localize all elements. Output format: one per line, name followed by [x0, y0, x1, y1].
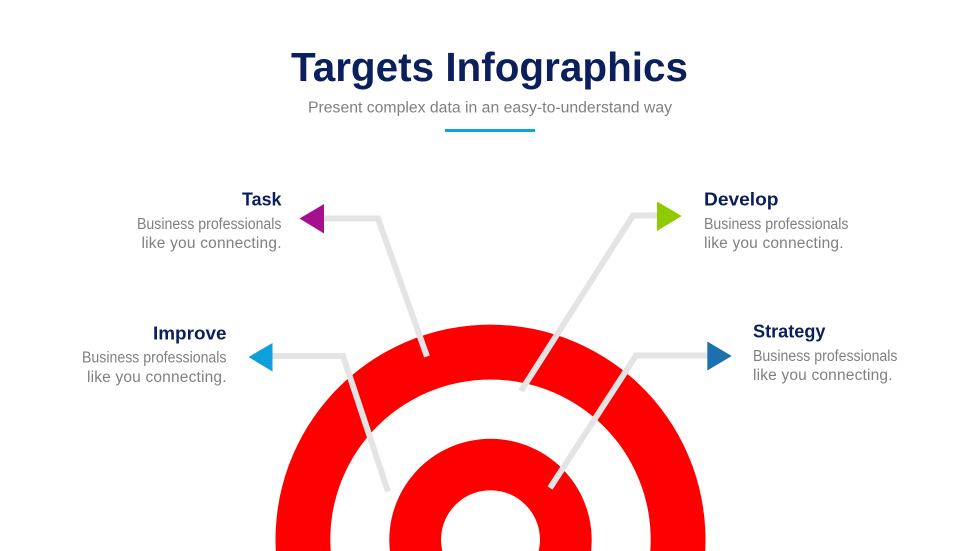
inner ring	[389, 439, 592, 551]
heading: task: Task	[242, 188, 282, 210]
subtitle: Present complex data in an easy-to-understand way	[308, 100, 672, 116]
title: Targets Infographics	[291, 44, 688, 90]
body: strategy: like you connecting.	[753, 367, 892, 384]
body: improve: like you connecting.	[87, 369, 226, 386]
leader line: task	[324, 218, 427, 356]
heading: strategy: Strategy	[753, 320, 826, 342]
arrow: strategy	[707, 342, 732, 370]
body: task: like you connecting.	[142, 235, 282, 252]
body: develop: like you connecting.	[704, 235, 844, 252]
leader line: develop	[521, 216, 658, 391]
leader line: strategy	[550, 356, 708, 488]
title underline	[445, 129, 535, 132]
body: task: Business professionals	[137, 216, 282, 233]
outer ring	[276, 325, 706, 551]
arrow: task	[300, 204, 324, 234]
label: improve	[82, 322, 227, 386]
label: task	[137, 188, 282, 252]
arrow: develop	[657, 202, 682, 231]
leader line: improve	[272, 356, 388, 492]
label: strategy	[753, 320, 898, 384]
heading: improve: Improve	[153, 322, 226, 344]
heading: develop: Develop	[704, 188, 778, 210]
body: improve: Business professionals	[82, 350, 227, 366]
body: develop: Business professionals	[704, 216, 849, 233]
body: strategy: Business professionals	[753, 348, 898, 365]
arrow: improve	[248, 343, 272, 372]
target chart	[276, 325, 706, 551]
label: develop	[704, 188, 849, 252]
